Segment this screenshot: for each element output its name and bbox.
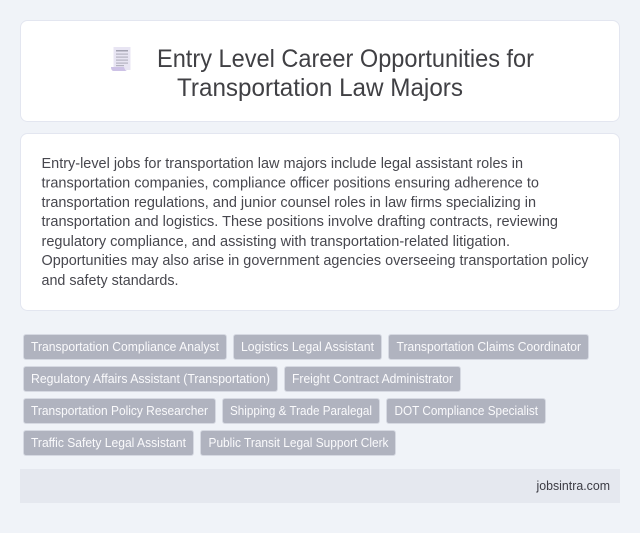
description text: transportation and logistics. These positions involve drafting contracts, reviewing xyxy=(42,213,558,230)
tag: Transportation Compliance Analyst xyxy=(31,340,220,354)
tag xyxy=(222,398,380,424)
tag: Transportation Claims Coordinator xyxy=(396,340,581,354)
tag: Traffic Safety Legal Assistant xyxy=(31,436,187,450)
tag xyxy=(24,366,278,392)
tag xyxy=(234,334,382,360)
tag xyxy=(24,430,194,456)
description text: transportation companies, compliance officer positions ensuring adherence to xyxy=(42,174,539,192)
tag: Transportation Policy Researcher xyxy=(31,404,208,418)
tag xyxy=(200,430,396,456)
tag xyxy=(386,398,546,424)
tag: Shipping & Trade Paralegal xyxy=(230,404,372,418)
description text: Opportunities may also arise in government agencies overseeing transportation policy xyxy=(42,252,589,269)
tag list xyxy=(24,334,588,456)
tag xyxy=(284,366,460,392)
tag: Freight Contract Administrator xyxy=(292,372,453,386)
title: Entry Level Career Opportunities for xyxy=(157,45,534,73)
tag xyxy=(24,398,216,424)
description text xyxy=(42,155,589,289)
panel: description card xyxy=(20,134,620,310)
tag: Regulatory Affairs Assistant (Transportation) xyxy=(31,372,270,386)
icon: paper scroll document xyxy=(111,47,130,71)
description text: Entry-level jobs for transportation law majors include legal assistant roles in xyxy=(42,155,523,172)
description text: and safety standards. xyxy=(42,272,178,289)
tag: Logistics Legal Assistant xyxy=(241,340,374,354)
tag: DOT Compliance Specialist xyxy=(394,404,538,418)
description text: regulatory compliance, and assisting with transportation-related litigation. xyxy=(42,233,510,250)
description text: transportation regulations, and junior counsel roles in law firms specializing in xyxy=(42,194,536,211)
footer source text: jobsintra.com xyxy=(536,479,610,493)
title xyxy=(157,45,534,102)
panel: title card xyxy=(20,20,620,122)
title: Transportation Law Majors xyxy=(177,74,463,102)
footer bar xyxy=(20,469,620,503)
tag xyxy=(24,334,226,360)
tag: Public Transit Legal Support Clerk xyxy=(208,436,389,450)
tag xyxy=(388,334,588,360)
